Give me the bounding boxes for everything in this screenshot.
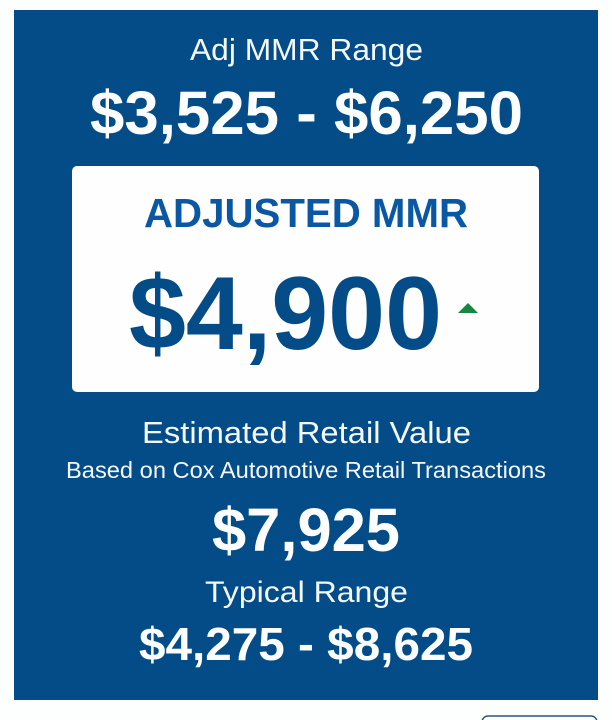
value: estimated retail value: $7,925 [212, 496, 400, 564]
text: data source note: Based on Cox Automotive Retail Transactions [66, 457, 546, 483]
heading: ADJUSTED MMR: ADJUSTED MMR [144, 190, 468, 236]
panel: adjusted MMR card [72, 166, 539, 392]
value: adjusted MMR amount: $4,900 [129, 256, 442, 372]
value: typical range: $4,275 - $8,625 [139, 618, 473, 670]
heading: Typical Range: Typical Range [205, 576, 408, 609]
value: adjusted MMR range: $3,525 - $6,250 [90, 79, 523, 147]
button outline cropped at bottom edge [482, 716, 597, 720]
heading: Adj MMR Range: Adj MMR Range [190, 32, 423, 67]
heading: Estimated Retail Value: Estimated Retail Value [142, 415, 471, 450]
icon: green up arrow [458, 303, 478, 313]
